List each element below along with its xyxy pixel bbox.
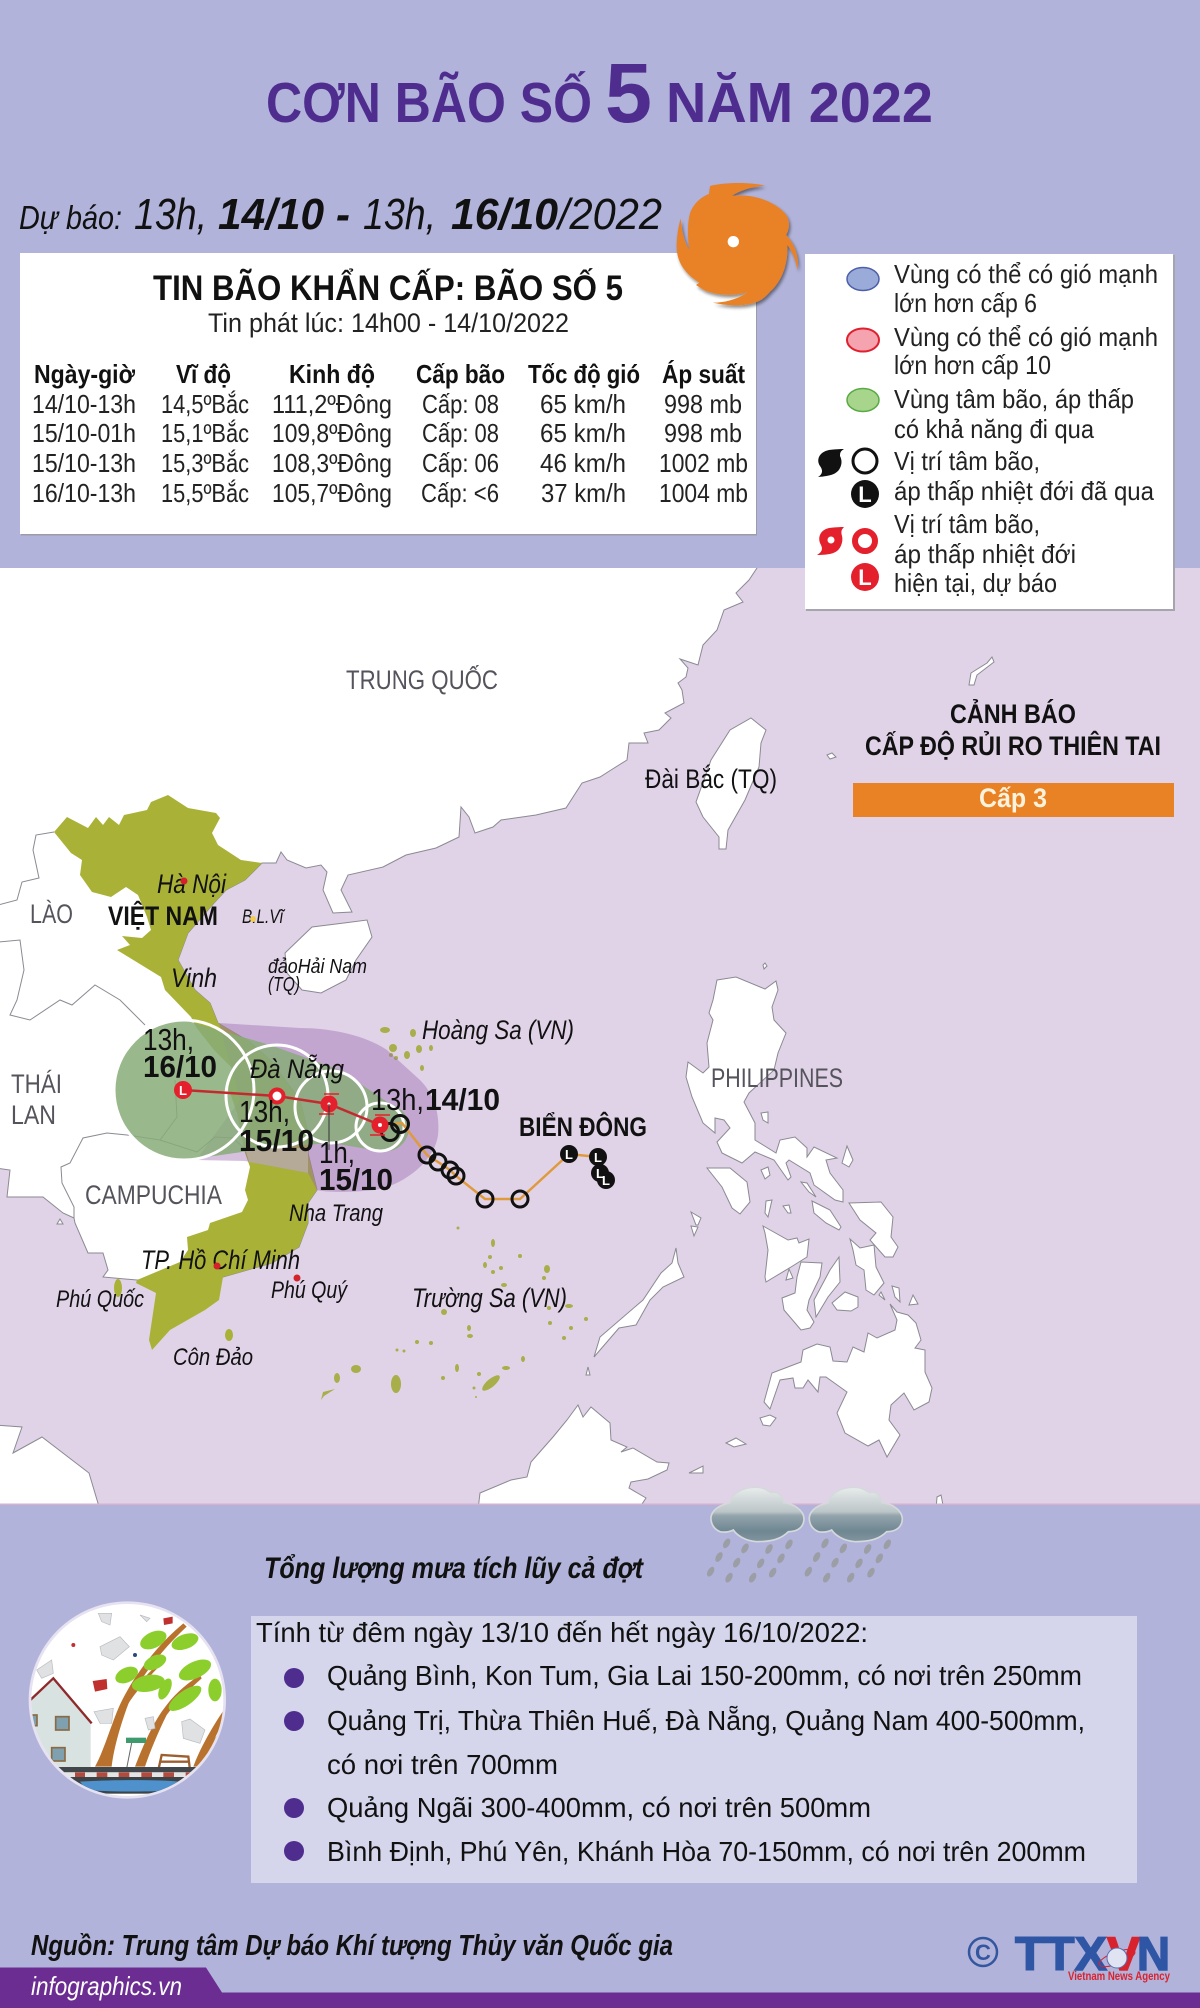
map labels: B.L.Vĩ — [242, 907, 285, 928]
table: storm forecast data: 111,2ºĐông — [272, 389, 392, 419]
icon: rain clouds — [705, 1487, 902, 1584]
table: storm forecast data: Cấp: <6 — [421, 478, 499, 508]
map: sea and land — [0, 560, 1200, 1510]
legend: green zone: Vùng tâm bão, áp thấp — [894, 384, 1134, 414]
map labels: THÁI — [11, 1069, 62, 1099]
past storm track: L — [596, 1166, 604, 1181]
rainfall bullet list: Quảng Ngãi 300-400mm, có nơi trên 500mm — [327, 1792, 871, 1823]
storm time labels: 15/10 — [319, 1162, 393, 1197]
panel: emergency storm bulletin: TIN BÃO KHẨN CẤP: BÃO SỐ 5 — [153, 268, 623, 308]
islands: Hoang Sa — [380, 1027, 433, 1071]
forecast period heading: 13h, — [134, 190, 207, 239]
legend: blue zone: lớn hơn cấp 6 — [894, 288, 1037, 318]
map labels: CAMPUCHIA — [85, 1180, 222, 1210]
past storm track: L — [565, 1147, 573, 1162]
map labels: TP. Hồ Chí Minh — [141, 1245, 300, 1275]
panel: emergency storm bulletin — [20, 253, 757, 536]
map labels: TRUNG QUỐC — [346, 663, 498, 695]
legend: green zone: có khả năng đi qua — [894, 414, 1094, 444]
rainfall bullet list: có nơi trên 700mm — [327, 1749, 558, 1780]
legend: blue zone: Vùng có thể có gió mạnh — [894, 259, 1158, 289]
table: storm forecast data: Vĩ độ — [176, 359, 231, 389]
legend: past positions: áp thấp nhiệt đới đã qua — [894, 476, 1154, 506]
logo: TTXVN — [969, 1927, 1170, 1983]
risk warning block — [853, 697, 1174, 817]
footer band: infographics.vn: infographics.vn — [31, 1971, 182, 2001]
icon: orange typhoon — [677, 183, 798, 305]
table: storm forecast data: Cấp bão — [416, 359, 505, 389]
map labels: (TQ) — [268, 974, 300, 996]
forecast storm track: L — [179, 1083, 187, 1098]
footer band: infographics.vn — [0, 1968, 1200, 2008]
logo: TTXVN: V — [1107, 1927, 1141, 1980]
legend: past positions: L — [858, 482, 872, 507]
table: storm forecast data: 15,5ºBắc — [161, 478, 249, 508]
logo: TTXVN: Vietnam News Agency — [1068, 1969, 1170, 1983]
legend: current and forecast positions: áp thấp nhiệt đới — [894, 539, 1076, 569]
land: Vietnam — [54, 795, 317, 1350]
map labels: Vinh — [171, 963, 217, 993]
map labels: Phú Quốc — [56, 1286, 144, 1313]
storm zone: stronger wind region — [196, 1023, 438, 1192]
risk warning block: CẢNH BÁO — [950, 697, 1076, 729]
map labels: Nha Trang — [289, 1200, 384, 1227]
legend: blue zone — [847, 259, 1158, 318]
source line: Nguồn: Trung tâm Dự báo Khí tượng Thủy văn Quốc gia — [31, 1930, 673, 1962]
table: storm forecast data — [32, 359, 748, 508]
legend: pink zone — [847, 322, 1158, 380]
table: storm forecast data: Ngày-giờ — [34, 359, 135, 389]
table: storm forecast data: 1004 mb — [659, 478, 748, 508]
legend: current and forecast positions — [817, 509, 1076, 598]
logo: TTXVN: C — [975, 1940, 991, 1965]
table: storm forecast data: 15,1ºBắc — [161, 418, 249, 448]
table: storm forecast data: 108,3ºĐông — [272, 448, 392, 478]
map labels: đảoHải Nam — [268, 956, 367, 978]
storm time labels: 1h, — [319, 1135, 355, 1170]
past storm track: L — [594, 1150, 602, 1165]
rainfall bullet list: Quảng Bình, Kon Tum, Gia Lai 150-200mm, có nơi trên 250mm — [327, 1660, 1082, 1691]
table: storm forecast data: Tốc độ gió — [528, 359, 640, 389]
table: storm forecast data: 105,7ºĐông — [272, 478, 392, 508]
map labels: Hà Nội — [157, 869, 227, 899]
logo: TTXVN: N — [1137, 1927, 1170, 1980]
table: storm forecast data: 46 km/h — [540, 448, 626, 478]
title: NĂM 2022 — [666, 71, 933, 135]
panel: rainfall details — [251, 1616, 1137, 1883]
table: storm forecast data: 14/10-13h — [32, 389, 136, 419]
past storm track: L — [602, 1173, 610, 1188]
table: storm forecast data: 15/10-13h — [32, 448, 136, 478]
map labels: Đà Nẵng — [250, 1054, 344, 1084]
risk warning block: Cấp 3 — [979, 783, 1047, 813]
table: storm forecast data: 15,3ºBắc — [161, 448, 249, 478]
land: Philippines — [586, 977, 944, 1510]
past storm track — [380, 1116, 615, 1207]
storm zone: forecast green cone — [113, 1020, 409, 1160]
storm time labels — [143, 1022, 500, 1197]
panel: rainfall details: Tính từ đêm ngày 13/10 đến hết ngày 16/10/2022: — [256, 1617, 868, 1648]
storm time labels: 13h, — [239, 1094, 290, 1129]
table: storm forecast data: 1002 mb — [659, 448, 748, 478]
table: storm forecast data: 65 km/h — [540, 389, 626, 419]
rainfall bullet list: Bình Định, Phú Yên, Khánh Hòa 70-150mm, có nơi trên 200mm — [327, 1836, 1086, 1867]
map labels: LÀO — [30, 899, 73, 929]
storm time labels: 13h, — [371, 1082, 424, 1117]
table: storm forecast data: Cấp: 08 — [422, 418, 499, 448]
land: inland borders — [0, 832, 246, 1218]
legend: current and forecast positions: Vị trí tâm bão, — [894, 509, 1040, 539]
rainfall bullet list: Quảng Trị, Thừa Thiên Huế, Đà Nẵng, Quảng Nam 400-500mm, — [327, 1705, 1085, 1736]
forecast period heading: Dự báo: — [19, 199, 122, 236]
map labels: Côn Đảo — [173, 1344, 253, 1371]
title: CƠN BÃO SỐ — [266, 70, 592, 135]
map labels: VIỆT NAM — [108, 900, 218, 931]
table: storm forecast data: Cấp: 08 — [422, 389, 499, 419]
legend: pink zone: Vùng có thể có gió mạnh — [894, 322, 1158, 352]
map labels: Trường Sa (VN) — [412, 1283, 567, 1313]
legend: green zone — [847, 384, 1134, 444]
islands: Truong Sa — [321, 1226, 588, 1400]
forecast period heading: 13h, — [363, 190, 436, 239]
land: Hainan — [285, 920, 372, 993]
table: storm forecast data: 14,5ºBắc — [161, 389, 249, 419]
title — [266, 46, 933, 140]
legend: past positions — [818, 446, 1154, 508]
panel: legend — [805, 254, 1175, 611]
islands: Phu Quoc and Con Dao — [114, 1279, 233, 1341]
map labels: Đài Bắc (TQ) — [645, 763, 777, 794]
table: storm forecast data: Áp suất — [662, 359, 745, 389]
map labels: PHILIPPINES — [711, 1063, 843, 1093]
table: storm forecast data: 998 mb — [664, 389, 742, 419]
land: Malay peninsula — [0, 1425, 100, 1510]
forecast period heading: 14/10 - — [218, 190, 350, 239]
table: storm forecast data: 109,8ºĐông — [272, 418, 392, 448]
table: storm forecast data: 998 mb — [664, 418, 742, 448]
table: storm forecast data: 16/10-13h — [32, 478, 136, 508]
storm time labels: 13h, — [143, 1022, 194, 1057]
land: northern small islands — [57, 657, 994, 1224]
panel: emergency storm bulletin: Tin phát lúc: 14h00 - 14/10/2022 — [208, 308, 569, 338]
land: Taiwan — [696, 718, 766, 849]
legend: current and forecast positions: hiện tại, dự báo — [894, 568, 1057, 598]
rainfall bullet list — [284, 1660, 1086, 1867]
legend: pink zone: lớn hơn cấp 10 — [894, 350, 1051, 380]
table: storm forecast data: 15/10-01h — [32, 418, 136, 448]
storm zone: overlap on southern Vietnam — [245, 1148, 308, 1173]
legend: past positions: Vị trí tâm bão, — [894, 446, 1040, 476]
illustration: storm over house — [29, 1601, 230, 1802]
table: storm forecast data: Cấp: 06 — [422, 448, 499, 478]
storm time labels: 16/10 — [143, 1049, 217, 1084]
legend: current and forecast positions: L — [858, 565, 872, 590]
storm time labels: 15/10 — [239, 1123, 314, 1158]
rainfall heading: Tổng lượng mưa tích lũy cả đợt — [264, 1552, 645, 1585]
forecast period heading: /2022 — [555, 190, 662, 239]
map labels: BIỂN ĐÔNG — [519, 1111, 647, 1142]
land: Borneo — [478, 1405, 669, 1510]
logo: TTXVN: TTX — [1015, 1927, 1107, 1980]
risk warning block: CẤP ĐỘ RỦI RO THIÊN TAI — [865, 729, 1161, 761]
forecast period heading: 16/10 — [451, 190, 559, 239]
map labels: Phú Quý — [271, 1277, 349, 1304]
storm time labels: 14/10 — [425, 1082, 500, 1117]
forecast period heading — [19, 190, 662, 239]
map labels: Hoàng Sa (VN) — [422, 1015, 574, 1045]
forecast storm track — [174, 1081, 390, 1150]
land: mainland Asia — [0, 560, 757, 1280]
map labels: LAN — [11, 1100, 56, 1130]
map labels — [11, 663, 843, 1371]
table: storm forecast data: 37 km/h — [541, 478, 626, 508]
forecast wind circles — [114, 1020, 404, 1160]
table: storm forecast data: Kinh độ — [289, 359, 375, 389]
title: 5 — [605, 46, 652, 140]
table: storm forecast data: 65 km/h — [540, 418, 626, 448]
